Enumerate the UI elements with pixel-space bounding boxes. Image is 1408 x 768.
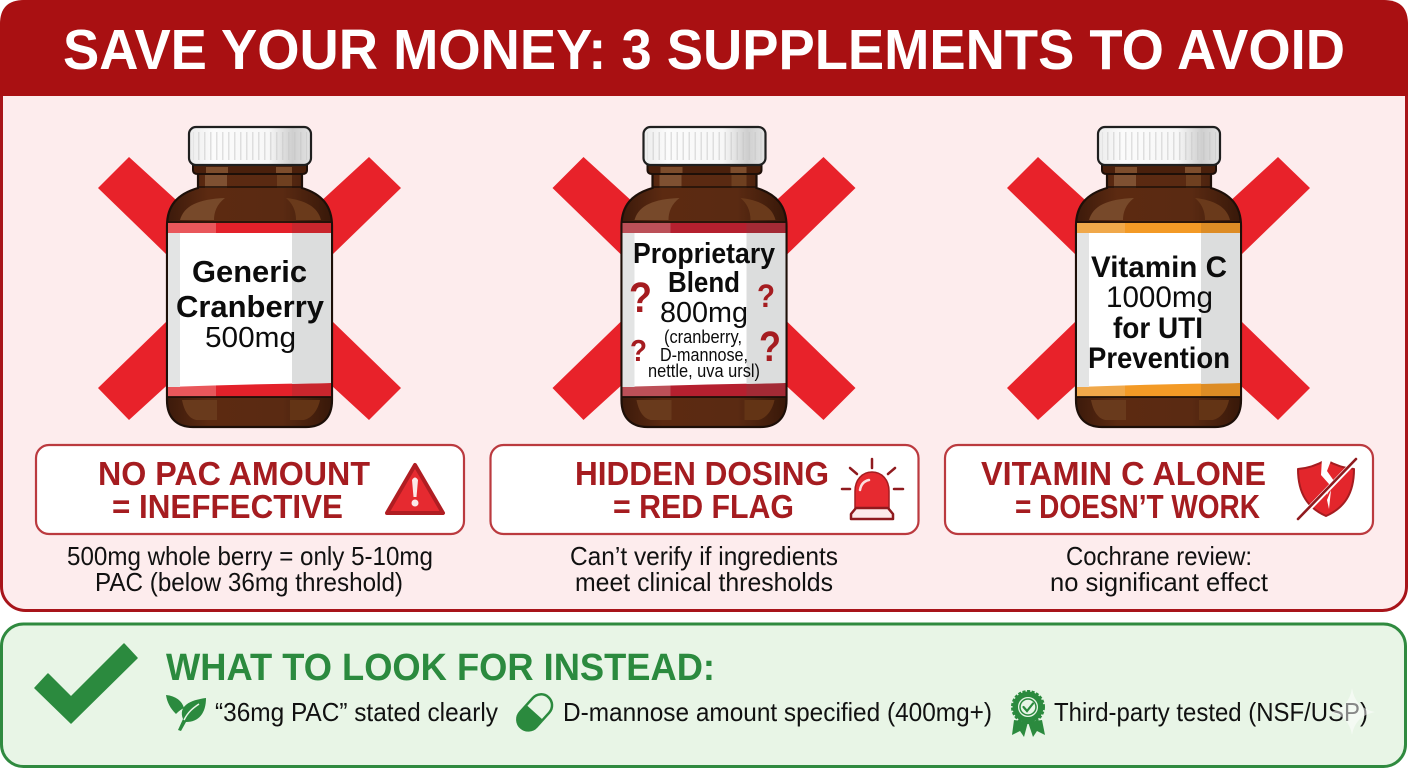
item: third-party tested: Third-party tested (NSF/USP) [1054,697,1368,727]
description [67,541,433,597]
icon: question marks: ? [757,278,775,314]
description: 500mg whole berry = only 5-10mg [67,541,433,571]
description [570,541,838,597]
description: meet clinical thresholds [575,567,833,597]
bottle label text: D-mannose, [660,345,748,365]
bottle label text: 1000mg [1106,281,1213,314]
bottle label text: nettle, uva ursl) [648,361,760,381]
callout: hidden dosing [490,445,918,534]
bottle label text: (cranberry, [664,327,742,347]
bottle label text: Prevention [1088,342,1230,375]
icon: warning triangle [387,465,443,513]
icon: capsule [513,690,557,735]
callout: vitamin C alone [945,445,1373,534]
icon: green check mark [35,644,137,723]
callout: hidden dosing: HIDDEN DOSING [575,455,829,492]
bottle label text [1088,251,1230,375]
bottle: proprietary blend [622,127,786,427]
column 1: generic cranberry [36,127,464,597]
icon: siren [842,459,903,519]
description [1050,541,1269,597]
bottle label text [633,238,775,381]
icon: rosette badge [1012,692,1045,737]
column 2: proprietary blend [490,127,918,597]
bottle label text: Blend [668,267,740,299]
bottle label text [176,254,325,354]
item: D-mannose [513,690,992,735]
title banner [0,0,1408,96]
description: Cochrane review: [1066,541,1252,571]
bottle label text: Proprietary [633,238,775,270]
icon: red X [552,157,856,420]
icon: red X [98,157,401,420]
bottle label text: Vitamin C [1091,251,1227,284]
title: SAVE YOUR MONEY: 3 SUPPLEMENTS TO AVOID [63,18,1345,82]
callout: hidden dosing: = RED FLAG [613,488,794,525]
icon: broken shield [1298,458,1356,519]
icon: question marks: ? [759,323,781,371]
icon: red X [1007,157,1310,420]
bottle label text: Cranberry [176,289,325,324]
callout: no PAC amount [36,445,464,534]
description: no significant effect [1050,567,1269,597]
icon: question marks: ? [630,333,647,368]
icon: sparkle [1330,688,1375,735]
bottle label text: for UTI [1113,312,1203,345]
callout: vitamin C alone: = DOESN’T WORK [1015,488,1260,525]
bottle label text: 800mg [660,297,748,329]
icon: leaf [166,695,206,731]
description: PAC (below 36mg threshold) [95,567,403,597]
item: PAC stated: “36mg PAC” stated clearly [215,697,498,727]
callout: vitamin C alone: VITAMIN C ALONE [981,455,1266,492]
callout: no PAC amount: NO PAC AMOUNT [98,455,370,492]
column 3: vitamin C [945,127,1373,597]
item: PAC stated [166,695,498,731]
description: Can’t verify if ingredients [570,541,838,571]
bottle label text: 500mg [205,322,296,354]
panel: supplements to avoid [0,0,1408,610]
icon: question marks: ? [629,274,652,322]
heading: WHAT TO LOOK FOR INSTEAD: [166,647,715,689]
bottle: generic cranberry [167,127,332,427]
icon: question marks [629,274,781,371]
item: D-mannose: D-mannose amount specified (400mg+) [563,697,992,727]
bottle label text: Generic [192,254,307,289]
callout: no PAC amount: = INEFFECTIVE [112,488,343,525]
item: third-party tested [1012,692,1368,737]
bottle: vitamin C [1076,127,1241,427]
panel: what to look for instead [2,624,1406,766]
